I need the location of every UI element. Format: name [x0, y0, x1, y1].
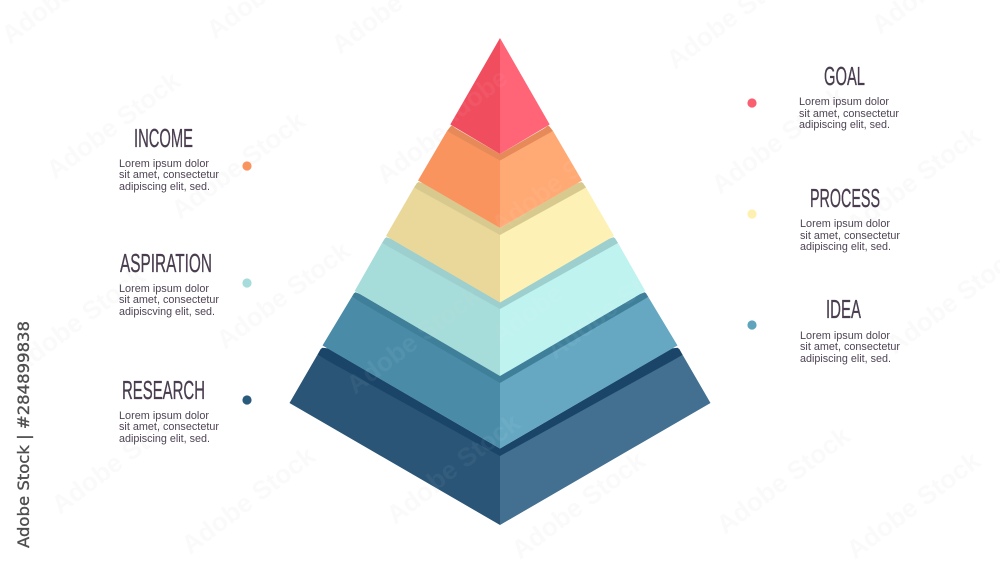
tier: goal	[450, 38, 550, 154]
text block: idea: sit amet, consectetur	[800, 341, 900, 353]
text block: goal: adipiscing elit, sed.	[799, 119, 890, 131]
heading: research: RESEARCH	[122, 375, 205, 405]
text block: income: adipiscing elit, sed.	[119, 181, 210, 193]
label: aspiration	[119, 248, 252, 318]
background watermarks: Adobe Stock	[176, 440, 321, 560]
icon: research dot	[242, 395, 252, 405]
tier: aspiration	[355, 237, 645, 376]
icon: income dot	[242, 161, 252, 171]
stock id text: Adobe Stock | #284899838	[14, 321, 33, 548]
background watermarks: Adobe Stock	[381, 410, 526, 530]
heading: aspiration: ASPIRATION	[120, 248, 212, 278]
label: goal	[747, 61, 899, 131]
text block: income: Lorem ipsum dolor	[119, 158, 209, 170]
background watermarks: Adobe Stock	[211, 235, 356, 355]
label: idea	[747, 294, 900, 365]
heading: idea: IDEA	[826, 294, 861, 324]
text block: research: sit amet, consectetur	[119, 421, 219, 433]
text block: process: Lorem ipsum dolor	[800, 218, 890, 230]
background watermarks: Adobe Stock	[841, 120, 986, 240]
background watermarks: Adobe Stock	[46, 400, 191, 520]
pyramid watermarks: Adobe Stock	[541, 245, 686, 365]
label: research	[119, 375, 252, 445]
pyramid watermarks: Adobe Stock	[486, 120, 631, 240]
background watermarks: Adobe Stock	[166, 105, 311, 225]
label: income	[119, 123, 252, 193]
background watermarks: Adobe Stock	[6, 260, 151, 380]
text block: idea: Lorem ipsum dolor	[800, 330, 890, 342]
background watermarks: Adobe Stock	[841, 445, 986, 563]
text block: aspiration: sit amet, consectetur	[119, 294, 219, 306]
text block: goal: Lorem ipsum dolor	[799, 96, 889, 108]
tier: research	[290, 348, 710, 525]
background watermarks: Adobe Stock	[706, 80, 851, 200]
background watermarks: Adobe Stock	[711, 420, 856, 540]
background watermarks: Adobe Stock	[506, 445, 651, 563]
icon: aspiration dot	[242, 278, 252, 288]
heading: goal: GOAL	[824, 61, 865, 91]
tier: idea	[322, 292, 678, 448]
background watermarks: Adobe	[371, 117, 453, 190]
heading: income: INCOME	[134, 123, 193, 153]
pyramid watermarks: Adobe Stock	[381, 407, 526, 527]
pyramid watermarks	[341, 62, 686, 527]
text block: idea: adipiscing elit, sed.	[800, 353, 891, 365]
pyramid	[290, 38, 710, 525]
pyramid watermarks: Adobe	[431, 62, 513, 135]
text block: goal: sit amet, consectetur	[799, 108, 899, 120]
tier: process	[386, 182, 614, 302]
text block: research: adipiscing elit, sed.	[119, 433, 210, 445]
text block: process: sit amet, consectetur	[800, 230, 900, 242]
text block: process: adipiscing elit, sed.	[800, 241, 891, 253]
icon: goal dot	[747, 98, 757, 108]
pyramid watermarks: Adobe	[486, 277, 568, 350]
text block: income: sit amet, consectetur	[119, 169, 219, 181]
pyramid watermarks: Adobe Stock	[341, 280, 486, 400]
text block: research: Lorem ipsum dolor	[119, 410, 209, 422]
icon: idea dot	[747, 320, 757, 330]
text block: aspiration: Lorem ipsum dolor	[119, 283, 209, 295]
icon: process dot	[747, 209, 757, 219]
heading: process: PROCESS	[810, 183, 880, 213]
text block: aspiration: adipiscving elit, sed.	[119, 306, 215, 318]
tier: income	[418, 126, 582, 228]
label: process	[747, 183, 900, 253]
background watermarks: Adobe Stock	[41, 65, 186, 185]
